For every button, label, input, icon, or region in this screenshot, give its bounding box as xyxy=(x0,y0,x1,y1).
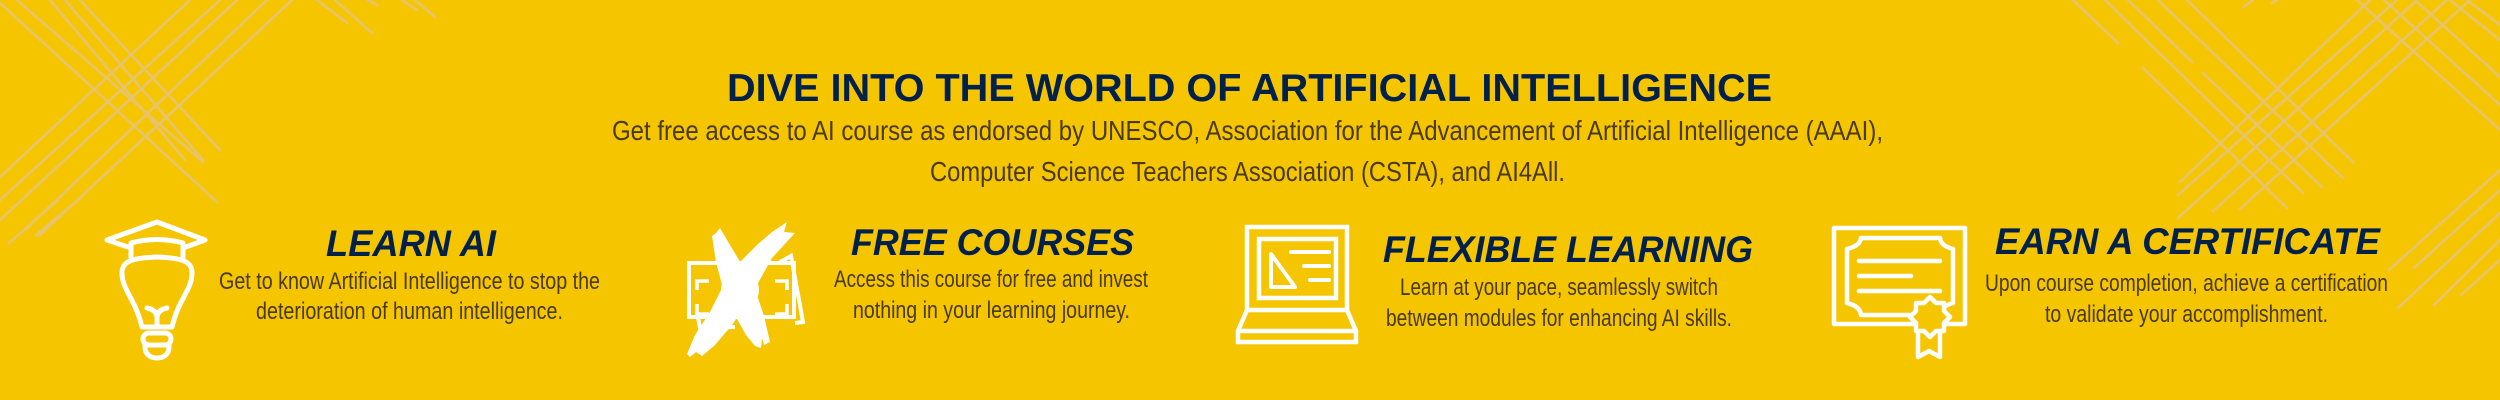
subtitle: Get free access to AI course as endorsed by UNESCO, Association for the Advancement of Artificial Intelligence (AAAI), xyxy=(612,115,1883,146)
panel: earn a certificate xyxy=(1834,221,2388,357)
description: earn a certificate xyxy=(1985,270,2388,328)
subtitle xyxy=(612,115,1883,187)
icon: graduation cap light bulb xyxy=(107,222,205,358)
panel: flexible learning xyxy=(1238,227,1753,342)
description: free courses: nothing in your learning journey. xyxy=(853,297,1130,324)
icon: certificate xyxy=(1834,228,1965,357)
description: free courses xyxy=(834,266,1148,324)
title: DIVE INTO THE WORLD OF ARTIFICIAL INTELLIGENCE xyxy=(727,67,1772,110)
description: earn a certificate: to validate your accomplishment. xyxy=(2045,301,2328,328)
heading: free courses: FREE COURSES xyxy=(851,222,1134,263)
icon: laptop xyxy=(1238,227,1356,342)
panel: learn AI xyxy=(107,222,600,358)
subtitle: Computer Science Teachers Association (CSTA), and AI4All. xyxy=(930,156,1565,187)
panel: free courses xyxy=(687,222,1148,357)
description: earn a certificate: Upon course completion, achieve a certification xyxy=(1985,270,2388,297)
heading: earn a certificate: EARN A CERTIFICATE xyxy=(1995,221,2381,262)
description: free courses: Access this course for free and invest xyxy=(834,266,1148,293)
heading: learn AI: LEARN AI xyxy=(326,223,497,264)
background crosshatch pattern: left xyxy=(0,0,435,243)
heading: flexible learning: FLEXIBLE LEARNING xyxy=(1383,229,1753,270)
description: learn AI xyxy=(219,268,600,325)
description: flexible learning: Learn at your pace, seamlessly switch xyxy=(1400,274,1718,301)
description: flexible learning xyxy=(1386,274,1732,332)
background crosshatch pattern: right xyxy=(2073,0,2500,308)
description: learn AI: Get to know Artificial Intelligence to stop the xyxy=(219,268,600,295)
icon: crossed out banknote xyxy=(687,222,803,357)
description: flexible learning: between modules for enhancing AI skills. xyxy=(1386,305,1732,332)
description: learn AI: deterioration of human intelligence. xyxy=(256,298,563,325)
